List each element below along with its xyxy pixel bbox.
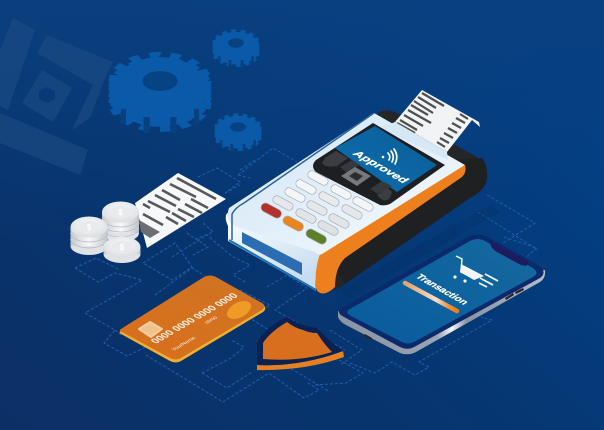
phone notch [490,241,528,266]
contactless icon [382,149,397,164]
card number: 0000 0000 0000 0000 [149,292,241,346]
screen soft buttons [322,151,392,200]
circuit lines [75,148,538,402]
progress bar [405,283,457,311]
Transaction text: Transaction [412,273,471,306]
coin stack: left: $ [87,223,92,232]
screen [335,126,437,192]
card logo [224,297,254,323]
screen bezel [313,123,445,205]
keypad [259,169,375,246]
navigation pad [341,167,371,186]
coins [70,202,140,263]
smartphone [338,234,545,354]
card chip [139,322,162,337]
phone body [339,234,544,349]
payment terminal [226,90,500,298]
receipt paper [395,90,480,152]
card expiry: 00/00 [204,316,220,325]
gear: small top [215,31,257,67]
terminal shadow [340,205,500,298]
shield [257,317,344,370]
receipt slot cover [378,122,448,160]
gear: large [114,55,206,133]
key: green [304,227,328,246]
cart icon [453,256,498,287]
coin stack: tall back: $ [118,208,123,217]
card slot [242,232,302,275]
key: orange [281,214,305,233]
phone screen [347,239,536,344]
terminal black base [300,110,487,290]
credit card [120,276,265,362]
card holder name: YourName [171,336,198,352]
receipt near coins [135,173,226,248]
terminal top face [228,113,465,255]
Approved text: Approved [349,150,411,185]
phone side buttons [364,288,524,340]
phone side [338,270,545,354]
terminal orange edge [315,165,466,293]
key: red [259,201,283,220]
coin: front: $ [120,243,125,252]
gear: small bottom [217,115,259,151]
background logo watermark [0,18,113,175]
terminal front face [226,213,320,291]
